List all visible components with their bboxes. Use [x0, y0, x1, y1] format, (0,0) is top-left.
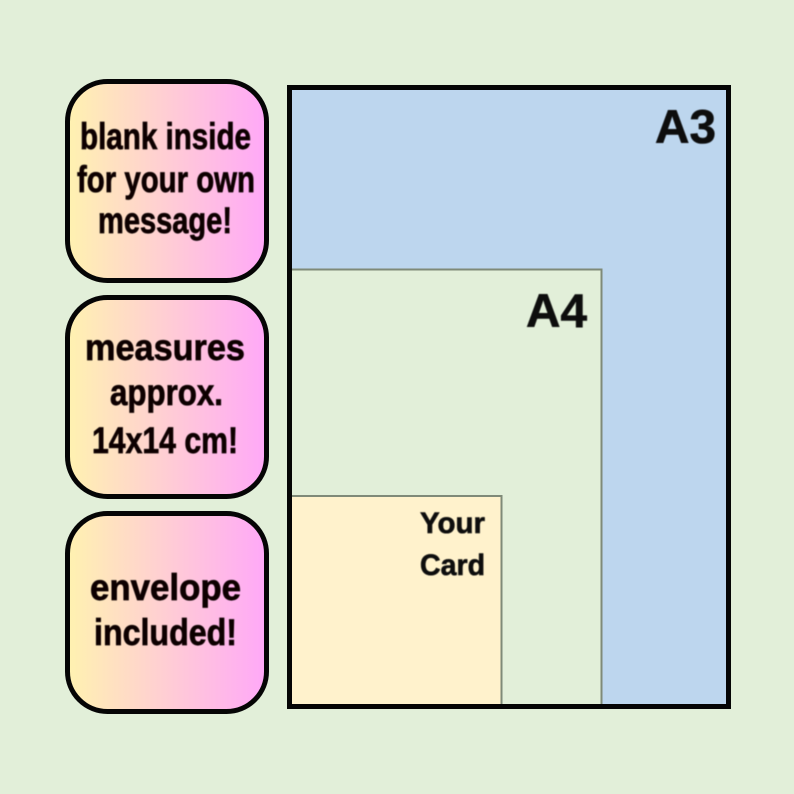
label: A4: A4: [526, 284, 587, 337]
label: A3: A3: [655, 100, 716, 153]
text: envelope included: included!: [94, 612, 237, 653]
label: your card: Card: [420, 549, 485, 582]
callout: measures: [68, 298, 266, 496]
panel: A3 sheet: [290, 88, 728, 706]
label: your card: [420, 507, 485, 582]
text: measures approx. 14x14 cm: approx.: [110, 372, 223, 413]
text: blank inside for your own message: blank inside: [80, 116, 251, 157]
callout: blank inside: [68, 82, 266, 280]
text: blank inside for your own message: [77, 116, 255, 241]
size comparison diagram: [290, 88, 728, 706]
callout: envelope: [68, 514, 266, 712]
panel: A4 sheet: [291, 270, 602, 706]
text: measures approx. 14x14 cm: measures: [85, 327, 245, 368]
text: blank inside for your own message: for your own: [77, 159, 255, 200]
text: envelope included: [90, 567, 241, 653]
text: measures approx. 14x14 cm: 14x14 cm!: [92, 420, 238, 461]
outer border: [290, 88, 728, 706]
text: blank inside for your own message: message!: [98, 200, 232, 241]
text: measures approx. 14x14 cm: [85, 327, 245, 461]
text: envelope included: envelope: [90, 567, 241, 608]
panel: your card: [291, 496, 502, 706]
label: your card: Your: [420, 507, 485, 540]
